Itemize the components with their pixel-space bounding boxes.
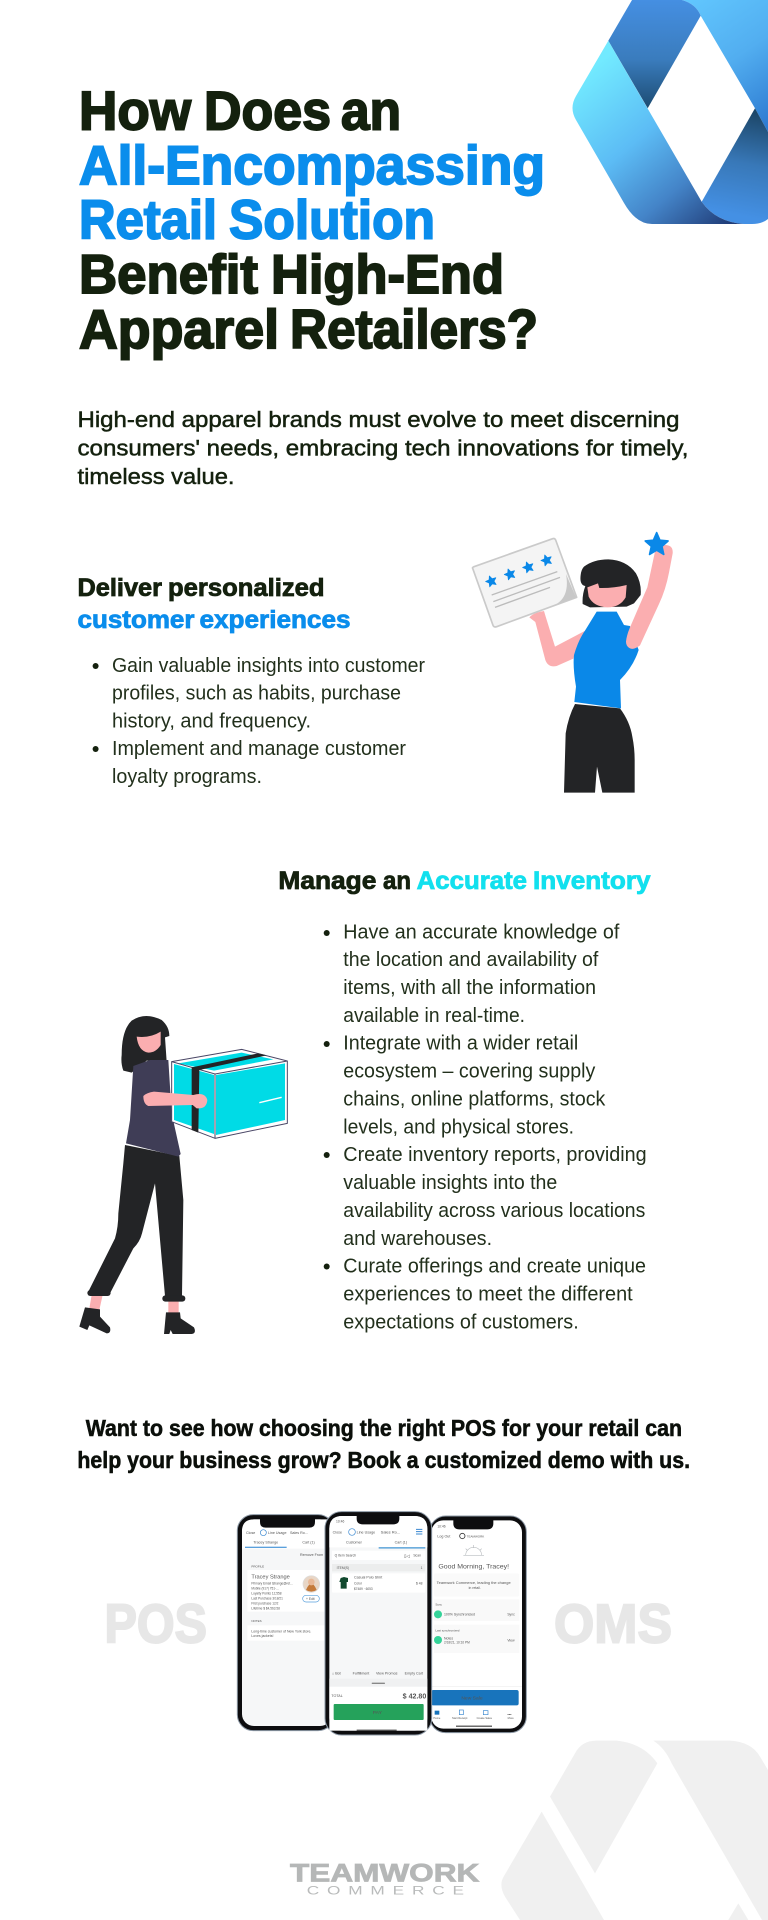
- phone: sale screen with checkout total: TEAMWORK: [467, 1534, 484, 1538]
- phone: customer profile screen: Primary Email tstrange@ret...: [251, 1581, 293, 1585]
- phone: customer profile screen: PROFILE: [251, 1564, 264, 1568]
- bullet list: inventory: expectations of customers.: [343, 1310, 579, 1333]
- phone: cart screen front: ⌂ Bot: [332, 1671, 341, 1675]
- phone: cart screen front: 1: [421, 1566, 423, 1570]
- phone: customer profile screen: Tracey Strange: [253, 1541, 278, 1545]
- phone: sale screen with checkout total: Last synchronized: [435, 1628, 460, 1632]
- phone: cart screen front: Sales Ro...: [381, 1529, 400, 1534]
- phone: customer profile screen: Long-time customer of New York store.: [251, 1630, 311, 1634]
- phone: cart screen front: $7489 · 6053: [354, 1587, 373, 1591]
- phone: customer profile screen: Lifetime $ $4,563.58: [251, 1606, 280, 1610]
- phone: sale screen with checkout total: Sync: [435, 1602, 442, 1606]
- title: How: [79, 80, 191, 142]
- section heading: personalized customer experiences: personalized: [168, 574, 324, 602]
- bullet list: customer experiences: [93, 654, 425, 788]
- title: Does: [204, 80, 331, 142]
- section heading: accurate inventory: Manage: [278, 867, 376, 895]
- phone: customer profile screen: [237, 1515, 334, 1731]
- title: an: [341, 80, 401, 142]
- brand wordmark: Teamwork Commerce: COMMERCE: [307, 1885, 464, 1898]
- title: All-Encompassing: [79, 134, 545, 196]
- phone: customer profile screen: Close: [246, 1531, 255, 1535]
- section heading: accurate inventory: [278, 867, 651, 895]
- section heading: personalized customer experiences: [78, 574, 350, 634]
- intro paragraph: consumers' needs, embracing tech innovations for timely,: [78, 436, 688, 460]
- section heading: personalized customer experiences: experiences: [200, 606, 350, 634]
- title: Retailers?: [290, 298, 538, 360]
- brand wordmark: Teamwork Commerce: [290, 1860, 479, 1898]
- section heading: accurate inventory: an: [383, 867, 411, 895]
- phone: sale screen with checkout total: New Sale: [461, 1696, 483, 1702]
- bullet list: inventory: items, with all the information: [343, 976, 596, 999]
- bullet list: inventory: ecosystem – covering supply: [343, 1060, 596, 1083]
- phone: cart screen front: $ 42.80: [403, 1693, 426, 1700]
- watermark logo mark: bottom right: [501, 1741, 768, 1920]
- bullet list: inventory: available in real-time.: [343, 1004, 525, 1027]
- phone: sale screen with checkout total: Create Sales: [477, 1716, 493, 1720]
- illustration: woman carrying a box: [79, 1016, 287, 1334]
- section heading: personalized customer experiences: Deliver: [78, 574, 162, 602]
- phone: cart screen front: TOTAL: [331, 1694, 343, 1698]
- phone: sale screen with checkout total: Good Morning, Tracey!: [438, 1564, 509, 1571]
- phone: customer profile screen: Sales Ro...: [290, 1531, 308, 1535]
- phone: customer profile screen: Loyalty Points 12,558: [251, 1591, 282, 1595]
- section heading: personalized customer experiences: customer: [78, 606, 195, 634]
- bullet list: inventory: Have an accurate knowledge of: [343, 920, 620, 943]
- intro paragraph: timeless value.: [78, 464, 234, 489]
- phone: customer profile screen: First purchase 12/2: [251, 1601, 279, 1605]
- phone: cart screen front: Line Usage: [357, 1530, 375, 1534]
- phone: sale screen with checkout total: Home: [433, 1716, 441, 1720]
- phone: cart screen front: Cart (1): [395, 1541, 407, 1545]
- call to action text: [77, 1415, 690, 1473]
- bullet list: inventory: chains, online platforms, stock: [343, 1088, 606, 1110]
- phone: sale screen with checkout total: 10:46: [437, 1524, 446, 1528]
- call to action text: help your business grow? Book a customized demo with us.: [77, 1447, 690, 1473]
- phone: cart screen front: Scan: [413, 1554, 421, 1558]
- phone: cart screen front: Close: [333, 1530, 342, 1534]
- phone: customer profile screen: Remove From: [300, 1553, 323, 1557]
- phone: sale screen with checkout total: View: [507, 1638, 515, 1642]
- phone: cart screen front: Casual Polo Shirt: [354, 1575, 382, 1579]
- brand wordmark: Teamwork Commerce: TEAMWORK: [290, 1860, 479, 1888]
- bullet list: inventory: the location and availability of: [343, 948, 599, 971]
- phone: sale screen with checkout total: •••: [507, 1711, 512, 1716]
- phone: cart screen front: Customer: [346, 1541, 363, 1545]
- title: High-End: [271, 243, 504, 305]
- bullet list: customer experiences: Implement and manage customer: [112, 737, 406, 760]
- illustration: woman holding review card and star: [472, 533, 673, 793]
- phone: customer profile screen: NOTES: [251, 1619, 262, 1623]
- bullet list: customer experiences: Gain valuable insights into customer: [112, 654, 425, 677]
- section heading: accurate inventory: Accurate: [417, 867, 527, 895]
- title: Benefit: [79, 243, 258, 305]
- phone: customer profile screen: Tracey Strange: [251, 1574, 290, 1580]
- phone: cart screen front: 10:46: [336, 1520, 344, 1524]
- phone: customer profile screen: + Edit: [306, 1597, 315, 1601]
- intro paragraph: [78, 407, 688, 489]
- phone: cart screen front: ITEM(S): [337, 1566, 349, 1570]
- phone: cart screen front: Color: [354, 1581, 363, 1585]
- section heading: accurate inventory: Inventory: [533, 867, 651, 895]
- bullet list: customer experiences: profiles, such as habits, purchase: [112, 682, 401, 704]
- phone: cart screen front: PAY: [373, 1710, 383, 1716]
- bullet list: inventory: experiences to meet the different: [343, 1282, 633, 1306]
- call to action text: Want to see how choosing the right POS for your retail can: [86, 1415, 682, 1441]
- phone: sale screen with checkout total: Teamwork Commerce, leading the change: [437, 1581, 511, 1585]
- phone: sale screen with checkout total: [430, 1516, 526, 1733]
- phone: cart screen front: Q Item Search: [335, 1554, 356, 1558]
- intro paragraph: High-end apparel brands must evolve to meet discerning: [78, 407, 680, 432]
- phone: sale screen with checkout total: 2/18/21, 10:10 PM: [444, 1640, 470, 1644]
- bullet list: inventory: [324, 920, 647, 1333]
- phone: cart screen front: $ 48: [416, 1581, 423, 1585]
- phone: customer profile screen: Cart (1): [302, 1541, 315, 1545]
- phone: sale screen with checkout total: Log Out: [437, 1535, 450, 1539]
- phone: customer profile screen: Line Usage: [268, 1531, 286, 1535]
- phone: customer profile screen: Loves jackets!: [251, 1634, 273, 1638]
- bullet list: inventory: Curate offerings and create unique: [343, 1255, 646, 1278]
- phone: customer profile screen: Last Purchase 3/18/21: [251, 1596, 283, 1600]
- phone: cart screen front: Fulfillment: [353, 1671, 369, 1675]
- bullet list: inventory: Integrate with a wider retail: [343, 1032, 578, 1055]
- phone: cart screen front: Empty Cart: [405, 1671, 423, 1675]
- label: OMS: OMS: [554, 1593, 672, 1655]
- label: POS: POS: [104, 1593, 207, 1655]
- phone: customer profile screen: Mobile (917) 751-...: [251, 1586, 279, 1590]
- phone: sale screen with checkout total: Start Receipt: [452, 1716, 468, 1720]
- phone: sale screen with checkout total: Sync: [507, 1613, 515, 1617]
- phone: sale screen with checkout total: More: [508, 1716, 514, 1720]
- bullet list: customer experiences: history, and frequency.: [112, 710, 311, 732]
- logo mark: top right ribbon: [572, 0, 768, 224]
- title: Solution: [229, 188, 435, 250]
- bullet list: inventory: and warehouses.: [343, 1227, 492, 1250]
- phone: sale screen with checkout total: in retail.: [469, 1586, 481, 1590]
- phone: cart screen front: ▯◁: [404, 1553, 410, 1558]
- bullet list: customer experiences: loyalty programs.: [112, 765, 262, 788]
- phone: sale screen with checkout total: 100% Synchronized: [444, 1613, 475, 1617]
- phone mockups: [237, 1512, 526, 1735]
- title: Apparel: [79, 298, 279, 360]
- title: Retail: [79, 188, 217, 250]
- title: [79, 80, 545, 360]
- phone: cart screen front: View Promos: [376, 1671, 398, 1675]
- phone: sale screen with checkout total: Notes: [444, 1636, 453, 1640]
- bullet list: inventory: Create inventory reports, providing: [343, 1143, 647, 1166]
- phone: cart screen front: [325, 1512, 432, 1735]
- bullet list: inventory: availability across various locations: [343, 1199, 645, 1222]
- bullet list: inventory: levels, and physical stores.: [343, 1115, 574, 1138]
- bullet list: inventory: valuable insights into the: [343, 1171, 557, 1194]
